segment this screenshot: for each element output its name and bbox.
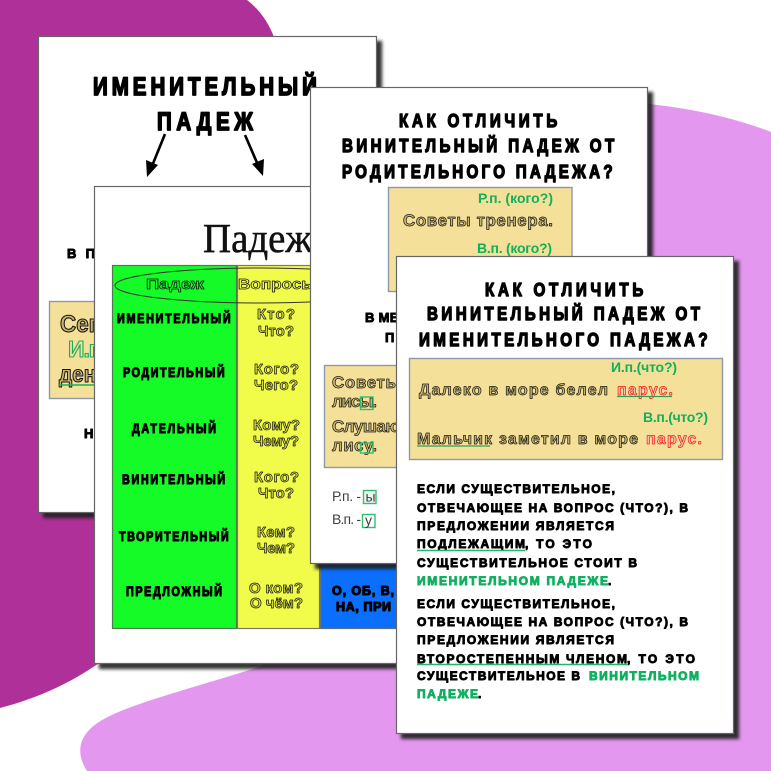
heading: nominative case [93,72,317,135]
table column: questions: Кого? [254,469,299,486]
text: partially hidden line: В ПРЕДЛОЖЕНИИ [67,246,217,261]
example box: sail: парус. [617,382,673,399]
example box: sail: В.п.(что?) [643,409,708,425]
heading: accusative vs genitive: ВИНИТЕЛЬНЫЙ ПАДЕЖ ОТ [342,136,615,156]
table column: case names: ДАТЕЛЬНЫЙ [132,420,216,436]
table column: questions: Чем? [257,540,295,557]
text: partially hidden line: НА [84,426,109,441]
heading: accusative vs genitive [342,111,615,182]
table column: questions: Чего? [254,377,298,394]
example box: trainer [388,188,572,292]
table column: case names: РОДИТЕЛЬНЫЙ [123,364,225,380]
ellipse highlight on table header [115,268,405,303]
example box: sail [410,358,722,460]
table column: questions: Что? [258,485,294,502]
example box: И.п. [68,336,108,362]
heading: accusative vs nominative: КАК ОТЛИЧИТЬ [485,280,643,300]
background blob: purple [0,0,274,708]
table column: questions: Что? [258,323,294,340]
table column: questions: О ком? [249,580,303,597]
table column: questions: Кем? [257,524,295,541]
example box: trainer: Советы тренера. [403,211,553,230]
text block: subject rule: . [608,574,611,588]
arrow: left [146,134,165,177]
heading: accusative vs genitive: КАК ОТЛИЧИТЬ [399,111,557,131]
legend: endings: ы [366,488,376,504]
example box [50,302,170,398]
table column: case names: ПРЕДЛОЖНЫЙ [126,583,222,599]
table column: questions: Кому? [253,417,300,434]
heading: accusative vs nominative [419,280,708,350]
example box: trainer: Р.п. (кого?) [478,190,553,206]
table column: questions [238,266,320,628]
table column: prepositions: НА, ПРИ [336,600,391,614]
table column: questions: Кого? [254,361,299,378]
text block: subject rule: ЕСЛИ СУЩЕСТВИТЕЛЬНОЕ, [417,482,615,496]
text block: object rule: . [478,687,481,701]
text block: object rule: ВИНИТЕЛЬНОМ [589,669,699,683]
example box: fox: Слушаю [332,417,400,436]
text block: subject rule: СУЩЕСТВИТЕЛЬНОЕ СТОИТ В [417,556,637,570]
table column: prepositions: О, ОБ, В, [332,584,394,598]
table column: questions: Вопросы [238,277,316,293]
table column: case names: ТВОРИТЕЛЬНЫЙ [119,528,229,544]
panel: accusative vs genitive page [310,88,648,564]
text block: subject rule: ОТВЕЧАЮЩЕЕ НА ВОПРОС (ЧТО?), В [417,501,688,515]
table column: case names: Падеж [146,277,205,293]
text block: subject rule: ИМЕНИТЕЛЬНОМ ПАДЕЖЕ [417,574,608,588]
text block: subject rule: ПОДЛЕЖАЩИМ [417,537,525,551]
panel: nominative case page [38,36,376,512]
example box: fox: Советы [332,373,400,392]
table column: questions: Кто? [257,306,295,323]
text block: object rule [417,597,699,701]
legend: endings: В.п. - [332,511,361,527]
heading: nominative case: ПАДЕЖ [157,107,253,135]
example box: fox [324,366,444,468]
example box: fox: лисы. [332,392,377,411]
legend: endings: у [365,512,372,528]
text: partially hidden lines: ПО [385,330,415,345]
text: partially hidden lines [365,310,425,345]
example box: sail: Мальчик заметил в море [417,431,638,448]
heading: accusative vs nominative: ВИНИТЕЛЬНЫЙ ПАДЕЖ ОТ [427,304,701,324]
text block: object rule: ПРЕДЛОЖЕНИИ ЯВЛЯЕТСЯ [417,633,614,647]
text block: object rule: СУЩЕСТВИТЕЛЬНОЕ В [417,669,580,683]
text block: object rule: ПАДЕЖЕ [417,687,478,701]
arrow: right [245,135,264,176]
text block: subject rule [417,482,688,588]
text: partially hidden lines: В МЕСТЕ [365,310,425,325]
table column: case names [112,266,236,628]
text block: object rule: , ТО ЭТО [627,652,695,666]
example box: Сегодня [60,311,152,338]
panel: accusative vs nominative page [396,256,734,734]
panel: cases table page [94,186,432,664]
example box: sail: парус. [646,431,702,448]
table column: questions: Чему? [253,433,299,450]
text block: subject rule: ПРЕДЛОЖЕНИИ ЯВЛЯЕТСЯ [417,519,614,533]
heading: accusative vs genitive: РОДИТЕЛЬНОГО ПАДЕЖА? [342,162,613,182]
example box: sail: Далеко в море белел [419,382,608,399]
heading: cases: Падежи [203,215,333,261]
text block: object rule: ВТОРОСТЕПЕННЫМ ЧЛЕНОМ [417,652,627,666]
table column: case names: ИМЕНИТЕЛЬНЫЙ [117,310,231,326]
text block: object rule: ЕСЛИ СУЩЕСТВИТЕЛЬНОЕ, [417,597,615,611]
background blob: pink [80,100,771,771]
example box: день [59,361,109,387]
table column: case names: ВИНИТЕЛЬНЫЙ [122,471,225,487]
heading: nominative case: ИМЕНИТЕЛЬНЫЙ [93,72,317,100]
table column: prepositions [320,266,432,628]
heading: accusative vs nominative: ИМЕНИТЕЛЬНОГО ПАДЕЖА? [419,330,708,350]
text block: object rule: ОТВЕЧАЮЩЕЕ НА ВОПРОС (ЧТО?), В [417,615,688,629]
text block: subject rule: , ТО ЭТО [525,537,592,551]
example box: sail: И.п.(что?) [611,359,677,375]
example box: fox: лису. [332,436,377,455]
legend: endings [332,488,376,528]
example box: trainer: В.п. (кого?) [477,240,552,256]
table column: questions: О чём? [250,595,303,612]
legend: endings: Р.п. - [332,488,361,504]
